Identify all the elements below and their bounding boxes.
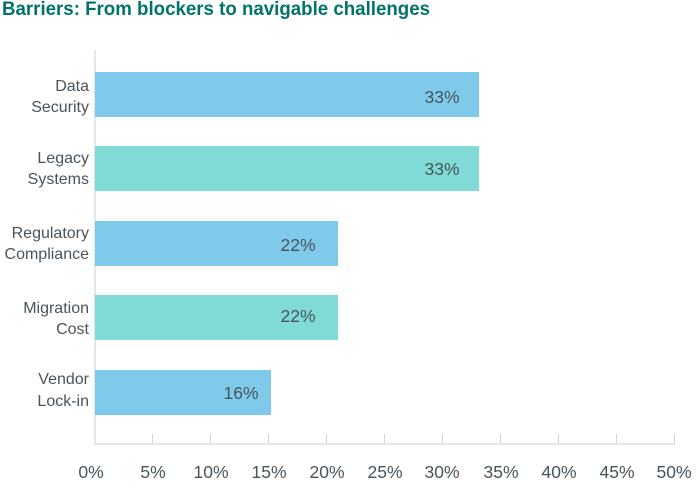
category labels xyxy=(5,78,90,410)
category labels: Security xyxy=(31,99,89,116)
category labels: Data xyxy=(55,78,89,95)
bar: Vendor Lock-in 16% xyxy=(95,370,271,415)
x-axis labels: 35% xyxy=(483,462,519,482)
bar: Legacy Systems 33% xyxy=(95,146,479,191)
axes xyxy=(94,50,675,445)
bar: Data Security 33%: 33% xyxy=(424,87,460,107)
category labels: Regulatory xyxy=(12,225,89,242)
x-axis labels: 30% xyxy=(424,462,460,482)
x-axis labels: 0% xyxy=(78,462,104,482)
bar: Legacy Systems 33%: 33% xyxy=(424,159,460,179)
bar: Regulatory Compliance 22% xyxy=(95,221,338,266)
x-axis labels: 50% xyxy=(656,462,692,482)
category labels: Compliance xyxy=(5,246,89,263)
bar: Regulatory Compliance 22%: 22% xyxy=(280,235,316,255)
x-axis labels: 20% xyxy=(309,462,345,482)
bar: Migration Cost 22% xyxy=(95,295,338,340)
bar: Vendor Lock-in 16%: 16% xyxy=(223,383,259,403)
category labels: Lock-in xyxy=(37,393,89,410)
x-axis labels: 40% xyxy=(541,462,577,482)
category labels: Vendor xyxy=(38,371,90,388)
bar: Data Security 33% xyxy=(95,72,479,117)
x-axis labels: 45% xyxy=(599,462,635,482)
category labels: Migration xyxy=(23,300,89,317)
x-axis labels: 10% xyxy=(193,462,229,482)
category labels: Legacy xyxy=(37,150,89,167)
x-axis labels: 25% xyxy=(367,462,403,482)
bar: Migration Cost 22%: 22% xyxy=(280,306,316,326)
x-axis labels xyxy=(78,462,692,482)
category labels: Systems xyxy=(28,171,89,188)
category labels: Cost xyxy=(56,321,90,338)
x-axis labels: 5% xyxy=(140,462,166,482)
x-axis labels: 15% xyxy=(251,462,287,482)
